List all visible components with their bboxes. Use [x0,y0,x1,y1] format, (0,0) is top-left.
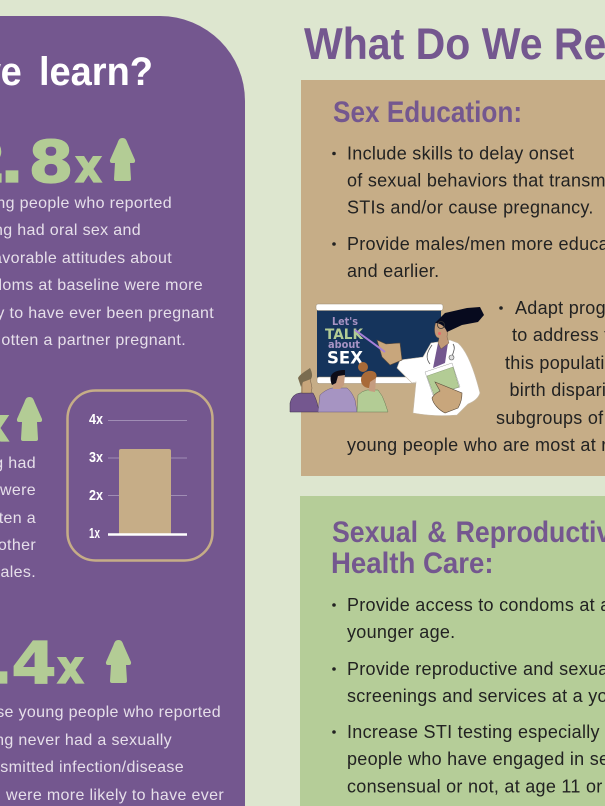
bullet list: skills and education: Include skills to delay onset [347,144,574,164]
student: right [357,362,388,412]
bullet list: adapt programs [347,298,605,455]
bullet list: care recommendations [332,595,605,796]
classroom board: Let's [332,315,358,328]
doctor teacher [355,307,484,416]
panel: sexual and reproductive health care [300,496,605,806]
bullet list: adapt programs: subgroups of [496,408,604,428]
panel: what did we learn [0,16,245,806]
text block: second finding [0,455,36,581]
classroom board: TALK [325,327,364,343]
bullet list: skills and education: and earlier. [347,261,439,281]
heading: sex education: Sex Education: [333,95,522,128]
icon: up arrow [106,640,131,683]
bar chart: 3x likelihood [68,390,212,560]
student: left [290,368,319,412]
statistic: 1.4x: 4 [11,629,57,697]
classroom board [316,304,443,384]
statistic: 2.8x: 8 [28,128,74,196]
icon: up arrow [17,397,42,441]
statistic: 1.4x [0,629,131,697]
chart axis labels: 3x [89,449,104,466]
heading: sexual and reproductive health care [331,516,605,580]
bullet list: care recommendations: Provide reproductive and sexual [347,659,605,679]
bullet list: skills and education: STIs and/or cause pregnancy. [347,198,594,218]
bullet list: skills and education [332,144,605,281]
statistic: 2.8x [0,128,135,196]
text block: second finding: were [0,482,36,499]
chart axis labels: 2x [89,487,104,504]
bullet list: care recommendations: younger age. [347,622,455,642]
illustration: teacher and students [290,304,484,416]
statistic: 3x [0,397,42,452]
icon: up arrow [110,138,135,181]
text block: first finding [0,195,214,349]
classroom board: SEX [327,348,363,368]
chart bar [119,449,171,534]
panel: sex education [290,80,605,476]
student: middle [318,370,357,412]
text block: third finding [0,704,224,804]
bullet list: care recommendations: Provide access to condoms at a [347,595,605,615]
statistic: 2.8x: . [0,128,24,196]
chart axis labels [89,411,104,542]
statistic: 2.8x: x [75,140,102,193]
heading: sexual and reproductive health care: Health Care: [331,547,494,580]
text block: third finding: were more likely to have ever [5,787,224,804]
classroom board: about [328,338,360,351]
chart axis labels: 4x [89,411,104,428]
chart axis labels: 1x [89,525,100,542]
statistic: 1.4x: x [57,641,84,694]
